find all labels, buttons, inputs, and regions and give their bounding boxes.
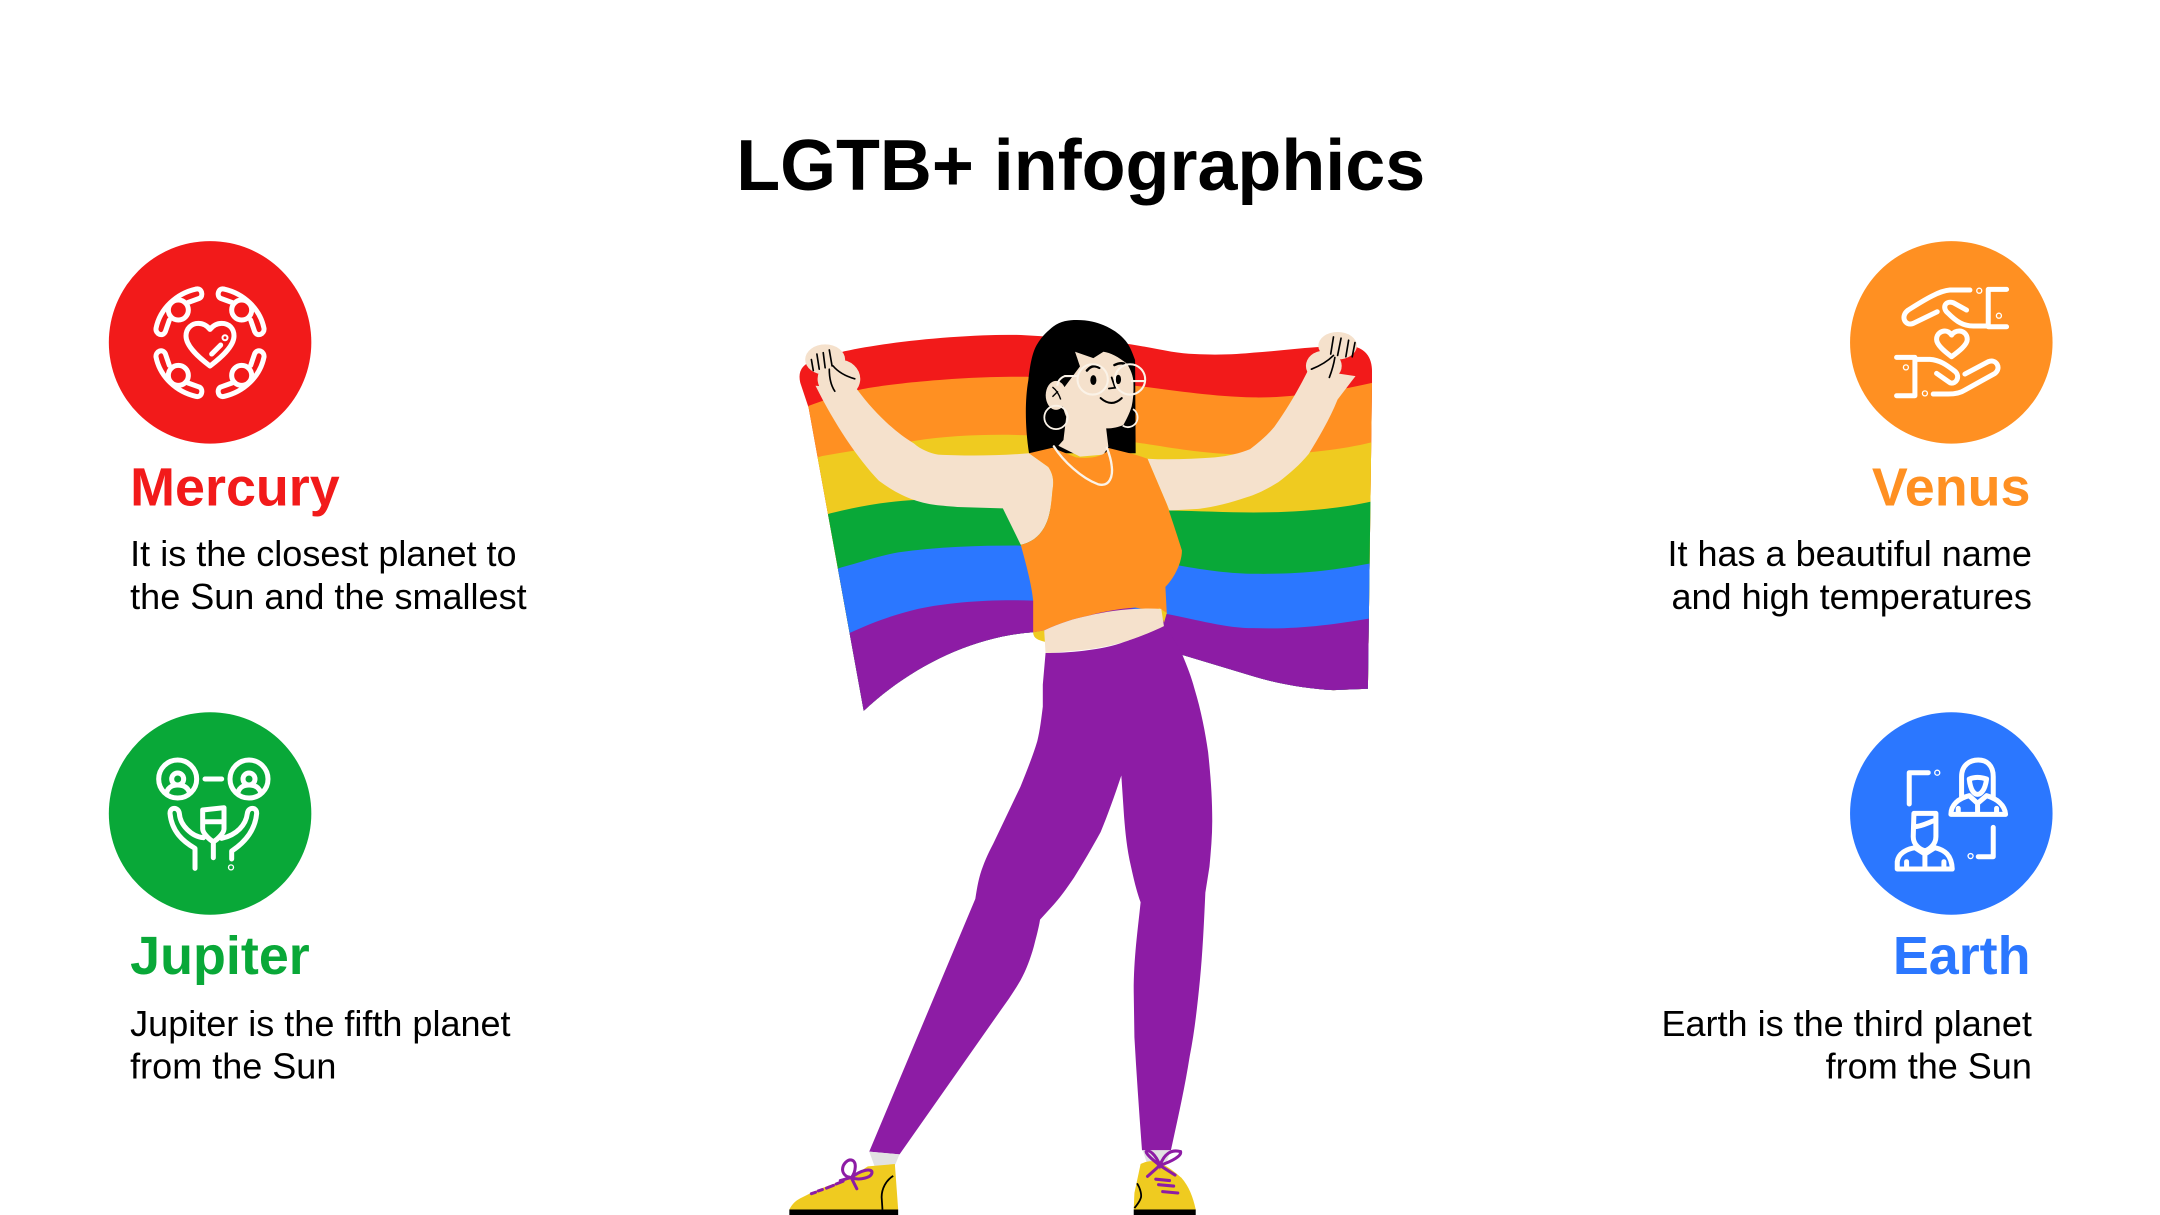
right shoe [1134, 1150, 1196, 1215]
left shoe [789, 1152, 900, 1215]
glasses [1057, 364, 1145, 395]
midriff [1044, 609, 1164, 654]
fists [805, 332, 1357, 398]
arms [816, 369, 1356, 545]
icon: couple and toast [109, 712, 311, 915]
panel: Jupiter [109, 712, 511, 1087]
heading: Venus: Venus [1872, 458, 2031, 518]
hair back [1026, 320, 1136, 453]
rainbow flag [800, 334, 1372, 711]
tank top [1021, 448, 1182, 632]
text: Venus description: and high temperatures [1671, 576, 2032, 617]
text: Jupiter description: Jupiter is the fifth planet [130, 1003, 511, 1044]
heading: Jupiter: Jupiter [130, 926, 310, 986]
text: Jupiter description: from the Sun [130, 1046, 336, 1087]
panel: Mercury [109, 241, 527, 617]
text: Earth description: Earth is the third planet [1662, 1003, 2032, 1044]
head and neck [1044, 352, 1145, 457]
heading: Mercury: Mercury [130, 458, 340, 518]
hem shadow [1033, 608, 1167, 642]
heading: Earth: Earth [1893, 926, 2031, 986]
panel: Venus [1667, 241, 2053, 617]
illustration: woman holding rainbow flag [771, 317, 1391, 1215]
face features [1087, 363, 1124, 403]
text: Mercury description: It is the closest planet to [130, 533, 517, 574]
icon: hands giving heart [1850, 241, 2053, 444]
icon: man and woman exchange [1850, 712, 2053, 915]
panel: Earth [1662, 712, 2053, 1087]
text: Earth description: from the Sun [1826, 1046, 2032, 1087]
text: Venus description: It has a beautiful name [1667, 533, 2032, 574]
icon: hands around heart [109, 241, 311, 444]
text: Mercury description: the Sun and the smallest [130, 576, 527, 617]
leggings [869, 625, 1212, 1154]
earrings [1044, 406, 1138, 429]
necklace [1054, 446, 1112, 485]
title: LGTB+ infographics [736, 126, 1425, 206]
